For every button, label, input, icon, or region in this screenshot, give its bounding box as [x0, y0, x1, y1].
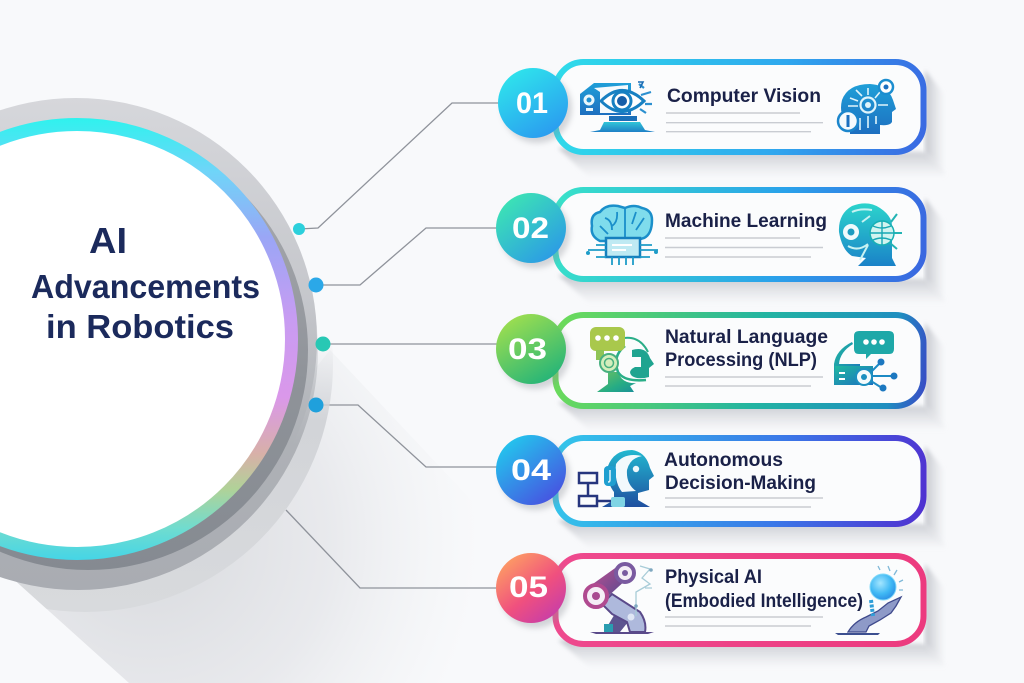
heading: [665, 326, 828, 371]
heading: Physical AI: [665, 566, 762, 588]
title: Advancements: [31, 268, 260, 305]
card 1: Computer Vision: [498, 62, 945, 178]
number 04: [496, 435, 570, 510]
number 02: 02: [512, 212, 549, 245]
card 5: Physical AI: [496, 553, 945, 668]
heading: Decision-Making: [665, 472, 816, 494]
card 2: Machine Learning: [496, 190, 945, 304]
number 05: [496, 553, 570, 628]
icon: robot hand with orb: [835, 566, 903, 635]
connector dots: [293, 223, 330, 412]
number 04: 04: [511, 454, 551, 487]
icon: robot head with flowchart: [579, 450, 654, 507]
number 05: 05: [509, 571, 548, 604]
heading: (Embodied Intelligence): [665, 590, 863, 612]
central circle: [0, 98, 333, 612]
heading: Autonomous: [664, 449, 783, 471]
heading: [664, 449, 816, 494]
icon: AI head circuit: [838, 80, 896, 134]
heading: Machine Learning: [665, 210, 827, 232]
icon: bubble and network: [834, 331, 898, 392]
title: [31, 220, 260, 345]
icon: eye on monitor: [580, 82, 655, 132]
text placeholder lines: [665, 377, 823, 386]
gradient ring: [0, 124, 292, 554]
heading: Computer Vision: [667, 85, 821, 107]
text placeholder lines: [665, 498, 823, 507]
number 01: 01: [516, 87, 548, 120]
central circle long shadow: [0, 350, 490, 683]
number 02: [496, 193, 570, 268]
title: AI: [89, 220, 127, 261]
connector lines: [286, 103, 505, 588]
text placeholder lines: [665, 617, 823, 626]
icon: robot arm: [585, 564, 654, 634]
heading: Natural Language: [665, 326, 828, 348]
heading: [665, 566, 863, 612]
text placeholder lines: [665, 238, 823, 257]
number 01: [498, 68, 572, 143]
number 03: [496, 314, 570, 389]
icon: speech head: [590, 327, 654, 392]
icon: brain chip: [586, 206, 658, 265]
card 4: Autonomous Decision-Making: [496, 435, 945, 549]
title: in Robotics: [46, 308, 234, 345]
number 03: 03: [508, 333, 547, 366]
text placeholder lines: [666, 113, 823, 132]
card 3: Natural Language Processing: [496, 314, 945, 431]
heading: Processing (NLP): [665, 349, 817, 371]
icon: AI head globe: [839, 203, 902, 266]
